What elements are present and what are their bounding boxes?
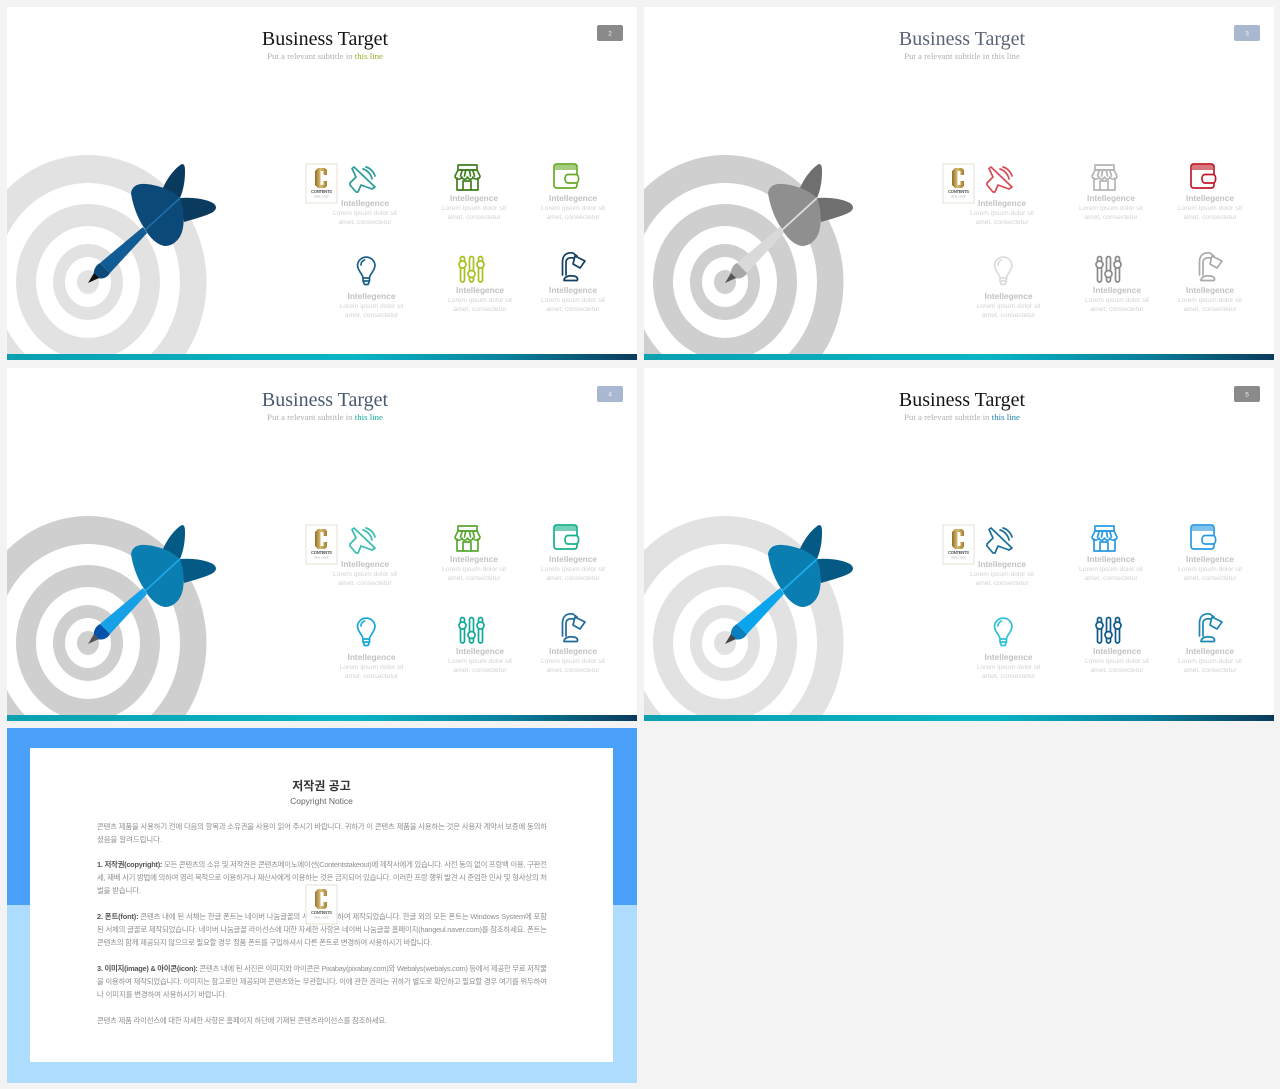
page badge (597, 386, 623, 402)
item: sliders: Intellegence (1093, 285, 1141, 295)
item: speaker: Lorem ipsum dolor sit (333, 210, 397, 217)
item: speaker (333, 528, 397, 587)
section 1 copyright: 벌을 받습니다. (97, 886, 141, 895)
item: lamp (541, 253, 605, 313)
item: lamp: Intellegence (1186, 646, 1234, 656)
item: sliders: amet, consectetur (1090, 306, 1144, 313)
item: sliders: Intellegence (1093, 646, 1141, 656)
item: sliders: Lorem ipsum dolor sit (1085, 297, 1149, 304)
item: lamp: Intellegence (1186, 285, 1234, 295)
item: bulb: Intellegence (348, 652, 396, 662)
item: lamp: amet, consectetur (546, 306, 600, 313)
item: wallet: Intellegence (549, 554, 597, 564)
page badge: 5 (1245, 392, 1249, 398)
item: bulb: Intellegence (985, 652, 1033, 662)
title: Business Target (899, 28, 1026, 50)
section 3 image and icon: 나 이미지를 변경하여 사용하시기 바랍니다. (97, 990, 227, 999)
item: store: Intellegence (450, 193, 498, 203)
item: lamp (1178, 614, 1242, 674)
intro paragraph: 셨음을 알려드립니다. (97, 835, 162, 844)
item: wallet (541, 164, 605, 221)
item: bulb: Lorem ipsum dolor sit (977, 664, 1041, 671)
bottom bar (7, 715, 637, 721)
item: lamp: Lorem ipsum dolor sit (541, 297, 605, 304)
item: speaker: Lorem ipsum dolor sit (970, 210, 1034, 217)
dart (88, 164, 216, 283)
logo stamp (306, 164, 337, 203)
item: bulb: Lorem ipsum dolor sit (340, 303, 404, 310)
page badge: 2 (608, 30, 612, 38)
item: lamp: Intellegence (549, 285, 597, 295)
license footer line: 콘텐츠 제품 라이선스에 대한 자세한 사항은 홈페이지 하단에 기재된 콘텐츠라이선스를 참조하세요. (97, 1016, 387, 1025)
item: speaker: amet, consectetur (338, 219, 392, 226)
logo stamp (943, 164, 974, 203)
item: bulb: Intellegence (985, 291, 1033, 301)
item: speaker: Intellegence (341, 559, 389, 569)
item: store: amet, consectetur (447, 214, 501, 221)
item: sliders (448, 256, 512, 313)
panel: slide 3 grey and red business target (644, 7, 1274, 360)
intro paragraph (97, 822, 547, 844)
item: speaker (970, 528, 1034, 587)
item: store: amet, consectetur (1084, 575, 1138, 582)
item: store: Intellegence (450, 554, 498, 564)
panel: copyright notice slide (7, 728, 637, 1083)
item: lamp (1178, 253, 1242, 313)
item: speaker: Intellegence (341, 198, 389, 208)
item: wallet (1178, 525, 1242, 582)
item: wallet: Lorem ipsum dolor sit (541, 205, 605, 212)
item: lamp: Lorem ipsum dolor sit (1178, 297, 1242, 304)
item: bulb (340, 618, 404, 680)
item: sliders (448, 618, 512, 674)
item: speaker: Lorem ipsum dolor sit (970, 571, 1034, 578)
item: wallet: Intellegence (1186, 554, 1234, 564)
item: lamp (541, 614, 605, 674)
page badge: 4 (608, 392, 612, 398)
item: speaker: Intellegence (978, 559, 1026, 569)
item: bulb: amet, consectetur (982, 673, 1036, 680)
item: store: Lorem ipsum dolor sit (442, 566, 506, 573)
item: lamp: Intellegence (549, 646, 597, 656)
item: wallet: amet, consectetur (1183, 575, 1237, 582)
item: speaker: amet, consectetur (975, 580, 1029, 587)
page badge (1234, 25, 1260, 41)
item: bulb (977, 618, 1041, 680)
item: sliders: Lorem ipsum dolor sit (448, 297, 512, 304)
notice title: 저작권 공고 (292, 778, 351, 793)
logo stamp (306, 525, 337, 564)
item: sliders: amet, consectetur (1090, 667, 1144, 674)
title: Business Target (262, 28, 389, 50)
page badge (597, 25, 623, 41)
item: lamp: amet, consectetur (546, 667, 600, 674)
item: bulb: Lorem ipsum dolor sit (340, 664, 404, 671)
item: store: Lorem ipsum dolor sit (442, 205, 506, 212)
item: wallet: amet, consectetur (546, 214, 600, 221)
item: store: amet, consectetur (1084, 214, 1138, 221)
section 1 copyright: 1. 저작권(copyright): 모든 콘텐츠의 소유 및 저작권은 콘텐츠메이노에이션(Contentstakeout)에 제작사에게 있습니다. 사전 동의 없이 프랑백 이용, 구판전 (97, 860, 547, 869)
panel: slide 2 navy business target (7, 7, 637, 360)
target board (0, 516, 206, 770)
target board (606, 516, 844, 770)
item: store: Lorem ipsum dolor sit (1079, 205, 1143, 212)
item: wallet: Lorem ipsum dolor sit (1178, 205, 1242, 212)
item: sliders: Lorem ipsum dolor sit (448, 658, 512, 665)
panel: slide 4 teal business target (7, 368, 637, 721)
item: wallet: Intellegence (549, 193, 597, 203)
intro paragraph: 콘텐츠 제품을 사용하기 전에 다음의 항목과 소유권을 사용이 읽어 주시기 바랍니다. 귀하가 이 콘텐츠 제품을 사용하는 것은 사용자 계약서 보증에 동의하 (97, 822, 547, 831)
dart (725, 164, 853, 283)
item: sliders: amet, consectetur (453, 306, 507, 313)
item: bulb: Intellegence (348, 291, 396, 301)
item: lamp: Lorem ipsum dolor sit (541, 658, 605, 665)
item: speaker (970, 167, 1034, 226)
item: lamp: Lorem ipsum dolor sit (1178, 658, 1242, 665)
item: wallet: Lorem ipsum dolor sit (1178, 566, 1242, 573)
subtitle: Put a relevant subtitle in this line (267, 51, 383, 61)
subtitle: Put a relevant subtitle in this line (904, 412, 1020, 422)
logo stamp center (306, 885, 337, 924)
item: wallet: amet, consectetur (1183, 214, 1237, 221)
item: wallet: Intellegence (1186, 193, 1234, 203)
item: store: amet, consectetur (447, 575, 501, 582)
item: store (1079, 526, 1143, 582)
item: speaker: amet, consectetur (338, 580, 392, 587)
section 2 font: 2. 폰트(font): 콘텐츠 내에 된 서체는 한글 폰트는 네이버 나눔글꼴의 서체를 사용하여 제작되었습니다. 한글 외의 모든 폰트는 Windows System에 포함 (97, 912, 547, 921)
item: sliders: Lorem ipsum dolor sit (1085, 658, 1149, 665)
title: Business Target (899, 389, 1026, 411)
page badge (1234, 386, 1260, 402)
item: bulb (977, 257, 1041, 319)
item: speaker (333, 167, 397, 226)
bottom bar (644, 354, 1274, 360)
subtitle: Put a relevant subtitle in this line (904, 51, 1020, 61)
section 3 image and icon: 을 이용하여 제작되었습니다. 이미지는 참고로만 제공되며 콘텐츠와는 무관합니다. 이에 관한 권리는 귀하가 별도로 확인하고 필요할 경우 여기를 위두하여 (97, 977, 547, 986)
item: wallet: Lorem ipsum dolor sit (541, 566, 605, 573)
target board (606, 155, 844, 409)
notice subtitle: Copyright Notice (290, 796, 353, 806)
item: bulb: amet, consectetur (345, 312, 399, 319)
item: bulb: Lorem ipsum dolor sit (977, 303, 1041, 310)
item: store (442, 165, 506, 221)
item: sliders (1085, 618, 1149, 674)
item: sliders (1085, 256, 1149, 313)
section 2 font: 된 서체의 글꼴로 제작되었습니다. 네이버 나눔글꼴 라이선스에 대한 자세한 사항은 네이버 나눔글꼴 홈페이지(hangeul.naver.com)를 참조하세요. 폰트는 (97, 925, 547, 934)
panel: slide 5 blue business target (644, 368, 1274, 721)
item: store: Intellegence (1087, 554, 1135, 564)
dart (725, 525, 853, 644)
section 1 copyright (97, 860, 547, 895)
item: store (1079, 165, 1143, 221)
item: wallet: amet, consectetur (546, 575, 600, 582)
item: bulb: amet, consectetur (345, 673, 399, 680)
bottom bar (7, 354, 637, 360)
item: speaker: Intellegence (978, 198, 1026, 208)
title: Business Target (262, 389, 389, 411)
item: lamp: amet, consectetur (1183, 667, 1237, 674)
subtitle: Put a relevant subtitle in this line (267, 412, 383, 422)
item: store: Lorem ipsum dolor sit (1079, 566, 1143, 573)
section 3 image and icon (97, 964, 547, 999)
notice card (30, 748, 613, 1062)
logo stamp (943, 525, 974, 564)
item: speaker: amet, consectetur (975, 219, 1029, 226)
section 3 image and icon: 3. 이미지(image) & 아이콘(icon): 콘텐츠 내에 된 사진은 이미지와 아이콘은 Pixabay(pixabay.com)와 Webalys(webalys.com) 등에서 제공한 무료 저작물 (97, 964, 547, 973)
item: store (442, 526, 506, 582)
item: lamp: amet, consectetur (1183, 306, 1237, 313)
item: wallet (541, 525, 605, 582)
section 2 font: 콘텐츠의 함께 제공되지 않으므로 필요할 경우 정품 폰트를 구입하셔서 다른 폰트로 변경하여 사용하시기 바랍니다. (97, 938, 432, 947)
section 1 copyright: 세, 재배 사기 방법에 의하여 영리 목적으로 이용하거나 재산사에게 이용하는 것은 금지되어 있습니다. 이러한 프랑 행위 발견 시 준엄한 민사 및 형사상의 처 (97, 873, 547, 882)
item: bulb: amet, consectetur (982, 312, 1036, 319)
item: sliders: Intellegence (456, 285, 504, 295)
item: sliders: Intellegence (456, 646, 504, 656)
section 2 font (97, 912, 547, 947)
page badge: 3 (1245, 30, 1249, 38)
dart (88, 525, 216, 644)
item: wallet (1178, 164, 1242, 221)
target board (0, 155, 206, 409)
item: sliders: amet, consectetur (453, 667, 507, 674)
item: store: Intellegence (1087, 193, 1135, 203)
item: speaker: Lorem ipsum dolor sit (333, 571, 397, 578)
bottom bar (644, 715, 1274, 721)
item: bulb (340, 257, 404, 319)
